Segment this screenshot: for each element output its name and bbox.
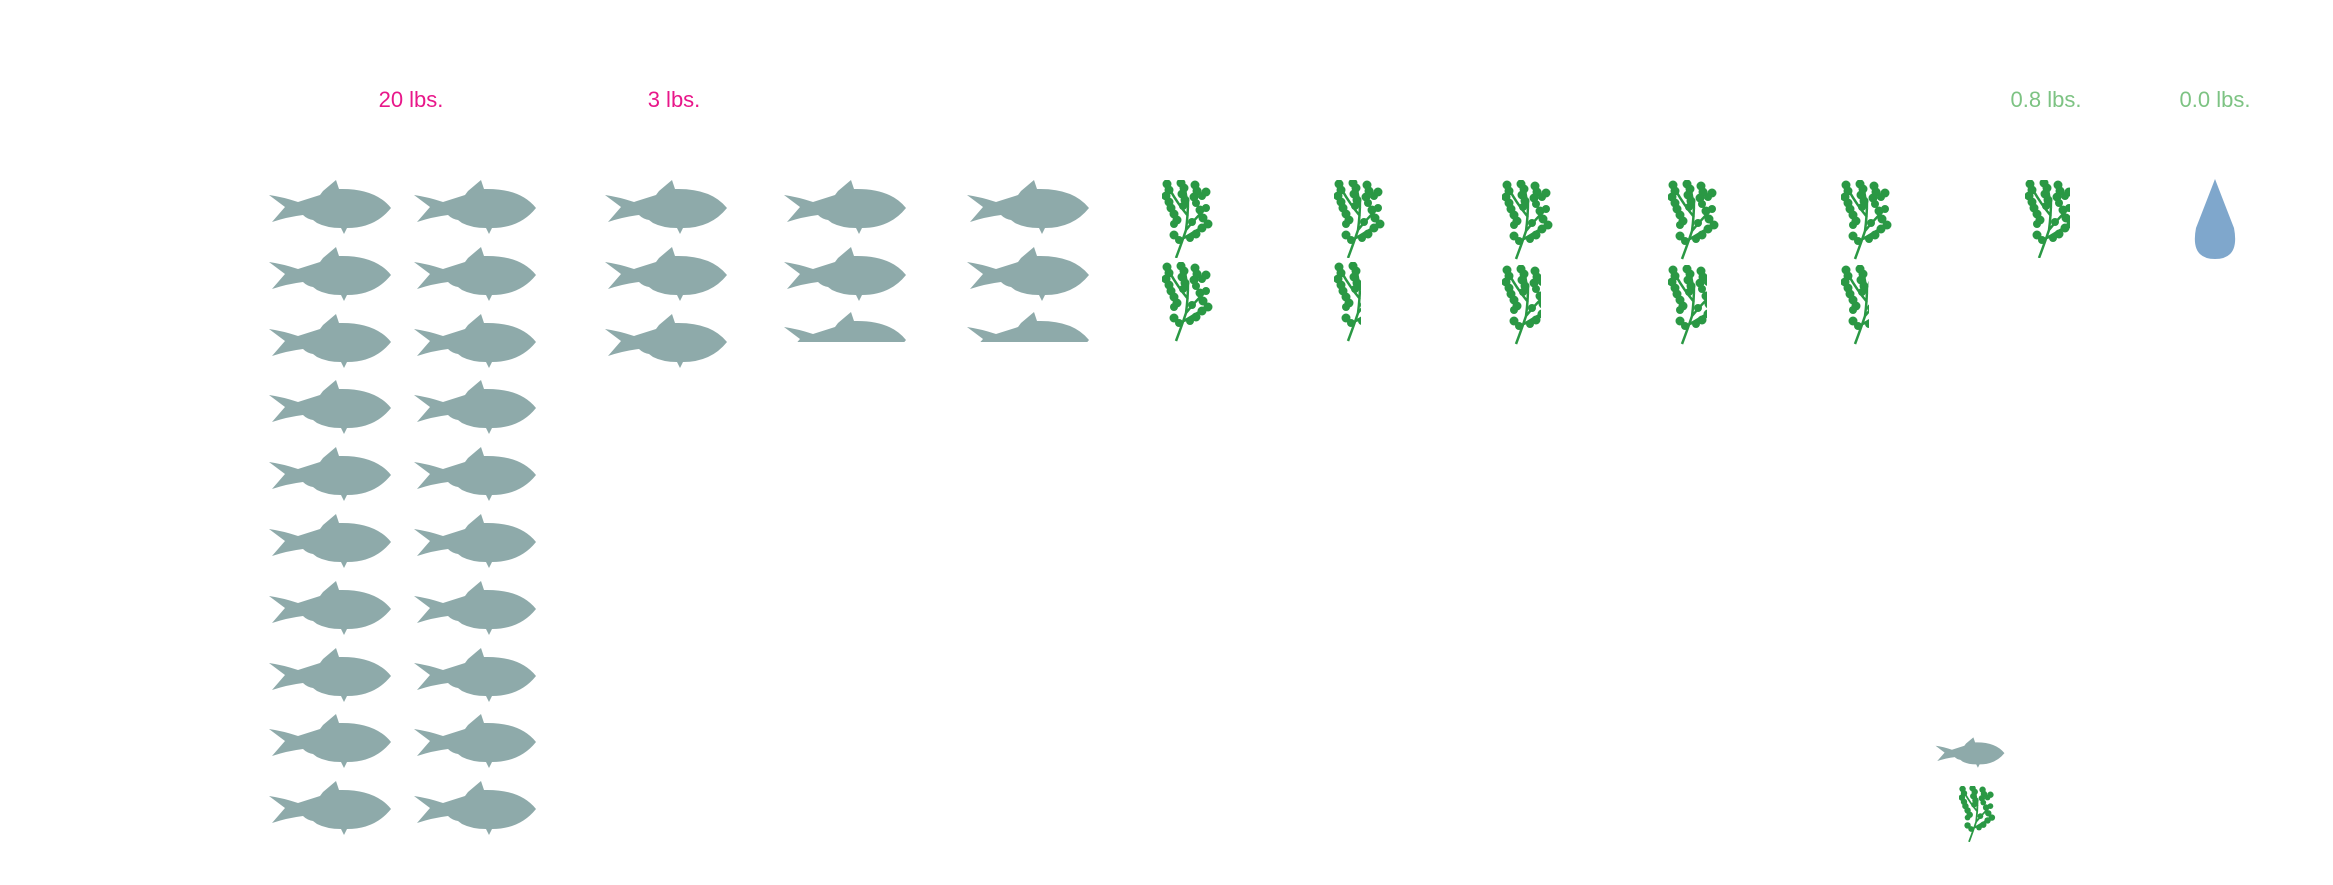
label: 3 lbs.: 3 lbs. — [648, 87, 700, 112]
icon: water drop — [2195, 179, 2235, 259]
fish column group: 20 lbs — [269, 180, 536, 835]
fish column 4 — [784, 180, 906, 366]
label: 20 lbs.: 20 lbs. — [379, 87, 443, 112]
label: 0.8 lbs.: 0.8 lbs. — [2011, 87, 2081, 112]
plant columns — [1162, 178, 2076, 344]
fish column: 3 lbs — [605, 180, 727, 368]
legend: plant — [1959, 785, 1995, 842]
label: 0.0 lbs.: 0.0 lbs. — [2180, 87, 2250, 112]
fish column 5 — [967, 180, 1089, 366]
legend: fish — [1936, 737, 2004, 768]
